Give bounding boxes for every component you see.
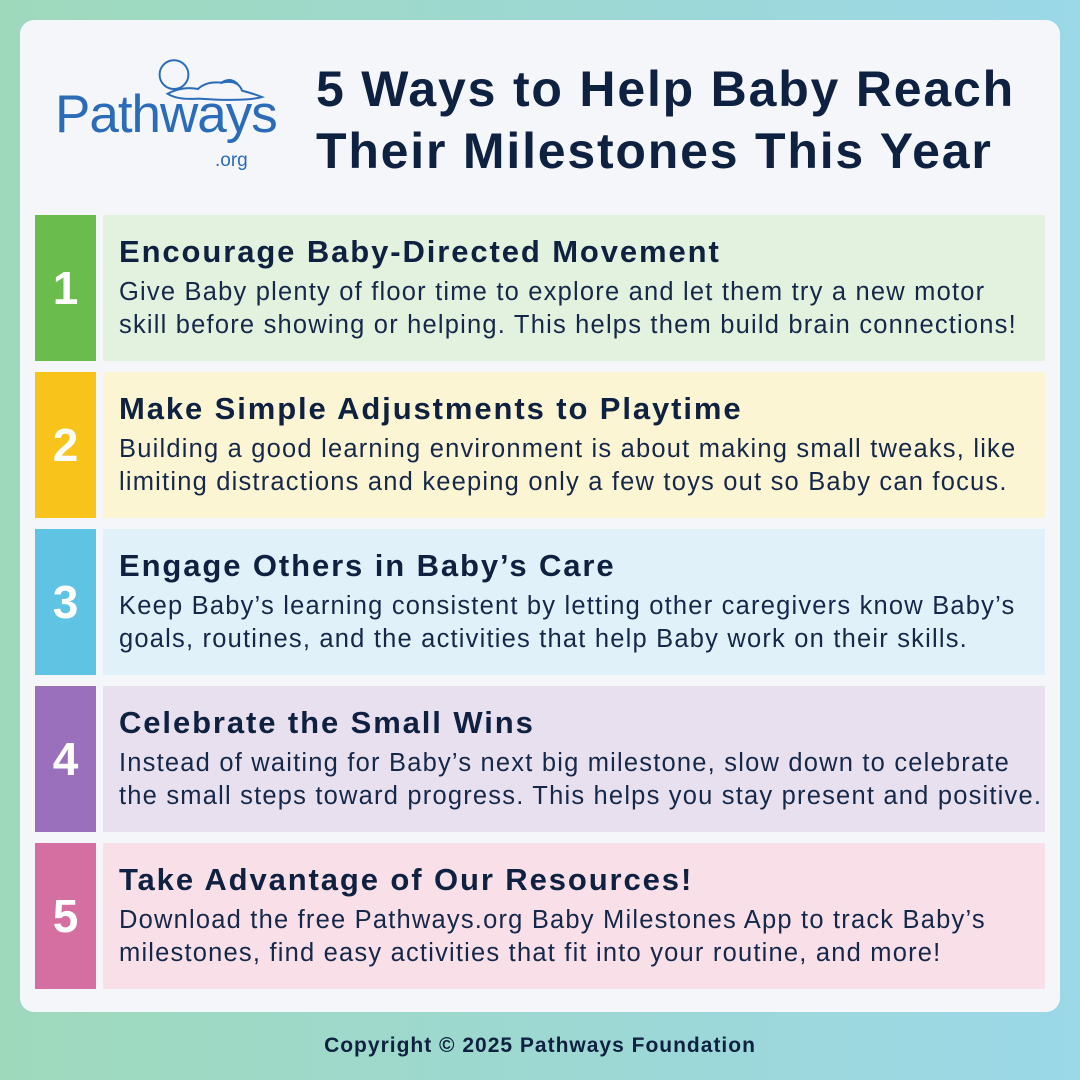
row 5 bbox=[35, 843, 1045, 989]
title bbox=[316, 61, 1015, 179]
row 3 bbox=[35, 529, 1045, 675]
title: Their Milestones This Year bbox=[316, 123, 993, 179]
panel 3 bbox=[103, 529, 1045, 675]
number 4 bbox=[35, 686, 96, 832]
row 4 bbox=[35, 686, 1045, 832]
number 1: 1 bbox=[53, 262, 78, 314]
panel 1: Encourage Baby-Directed Movement bbox=[119, 234, 721, 269]
panel 2: limiting distractions and keeping only a few toys out so Baby can focus. bbox=[119, 468, 1008, 496]
panel 3: goals, routines, and the activities that help Baby work on their skills. bbox=[119, 625, 968, 653]
panel 5 bbox=[103, 843, 1045, 989]
panel 5: Download the free Pathways.org Baby Milestones App to track Baby’s bbox=[119, 906, 986, 934]
panel 4: the small steps toward progress. This helps you stay present and positive. bbox=[119, 782, 1042, 810]
footer: Copyright © 2025 Pathways Foundation bbox=[324, 1034, 756, 1057]
number 1 bbox=[35, 215, 96, 361]
number 3 bbox=[35, 529, 96, 675]
number 5: 5 bbox=[53, 890, 78, 942]
logo: .org bbox=[215, 150, 248, 171]
number 4: 4 bbox=[53, 733, 78, 785]
row 1 bbox=[35, 215, 1045, 361]
number 2: 2 bbox=[53, 419, 78, 471]
panel 1: Give Baby plenty of floor time to explore and let them try a new motor bbox=[119, 278, 985, 306]
number 2 bbox=[35, 372, 96, 518]
panel 4: Celebrate the Small Wins bbox=[119, 705, 535, 740]
panel 5: Take Advantage of Our Resources! bbox=[119, 862, 693, 897]
number 3: 3 bbox=[53, 576, 78, 628]
panel 3: Engage Others in Baby’s Care bbox=[119, 548, 616, 583]
panel 5: milestones, find easy activities that fit into your routine, and more! bbox=[119, 939, 941, 967]
number 5 bbox=[35, 843, 96, 989]
panel 2 bbox=[103, 372, 1045, 518]
title: 5 Ways to Help Baby Reach bbox=[316, 61, 1015, 117]
panel 2: Make Simple Adjustments to Playtime bbox=[119, 391, 743, 426]
panel 3: Keep Baby’s learning consistent by letting other caregivers know Baby’s bbox=[119, 592, 1015, 620]
panel 1: skill before showing or helping. This helps them build brain connections! bbox=[119, 311, 1017, 339]
logo bbox=[55, 59, 277, 171]
panel 2: Building a good learning environment is about making small tweaks, like bbox=[119, 435, 1016, 463]
icon: baby bbox=[158, 59, 265, 101]
row 2 bbox=[35, 372, 1045, 518]
panel 4: Instead of waiting for Baby’s next big milestone, slow down to celebrate bbox=[119, 749, 1010, 777]
panel 1 bbox=[103, 215, 1045, 361]
panel 4 bbox=[103, 686, 1045, 832]
logo text: Pathways bbox=[55, 85, 277, 144]
